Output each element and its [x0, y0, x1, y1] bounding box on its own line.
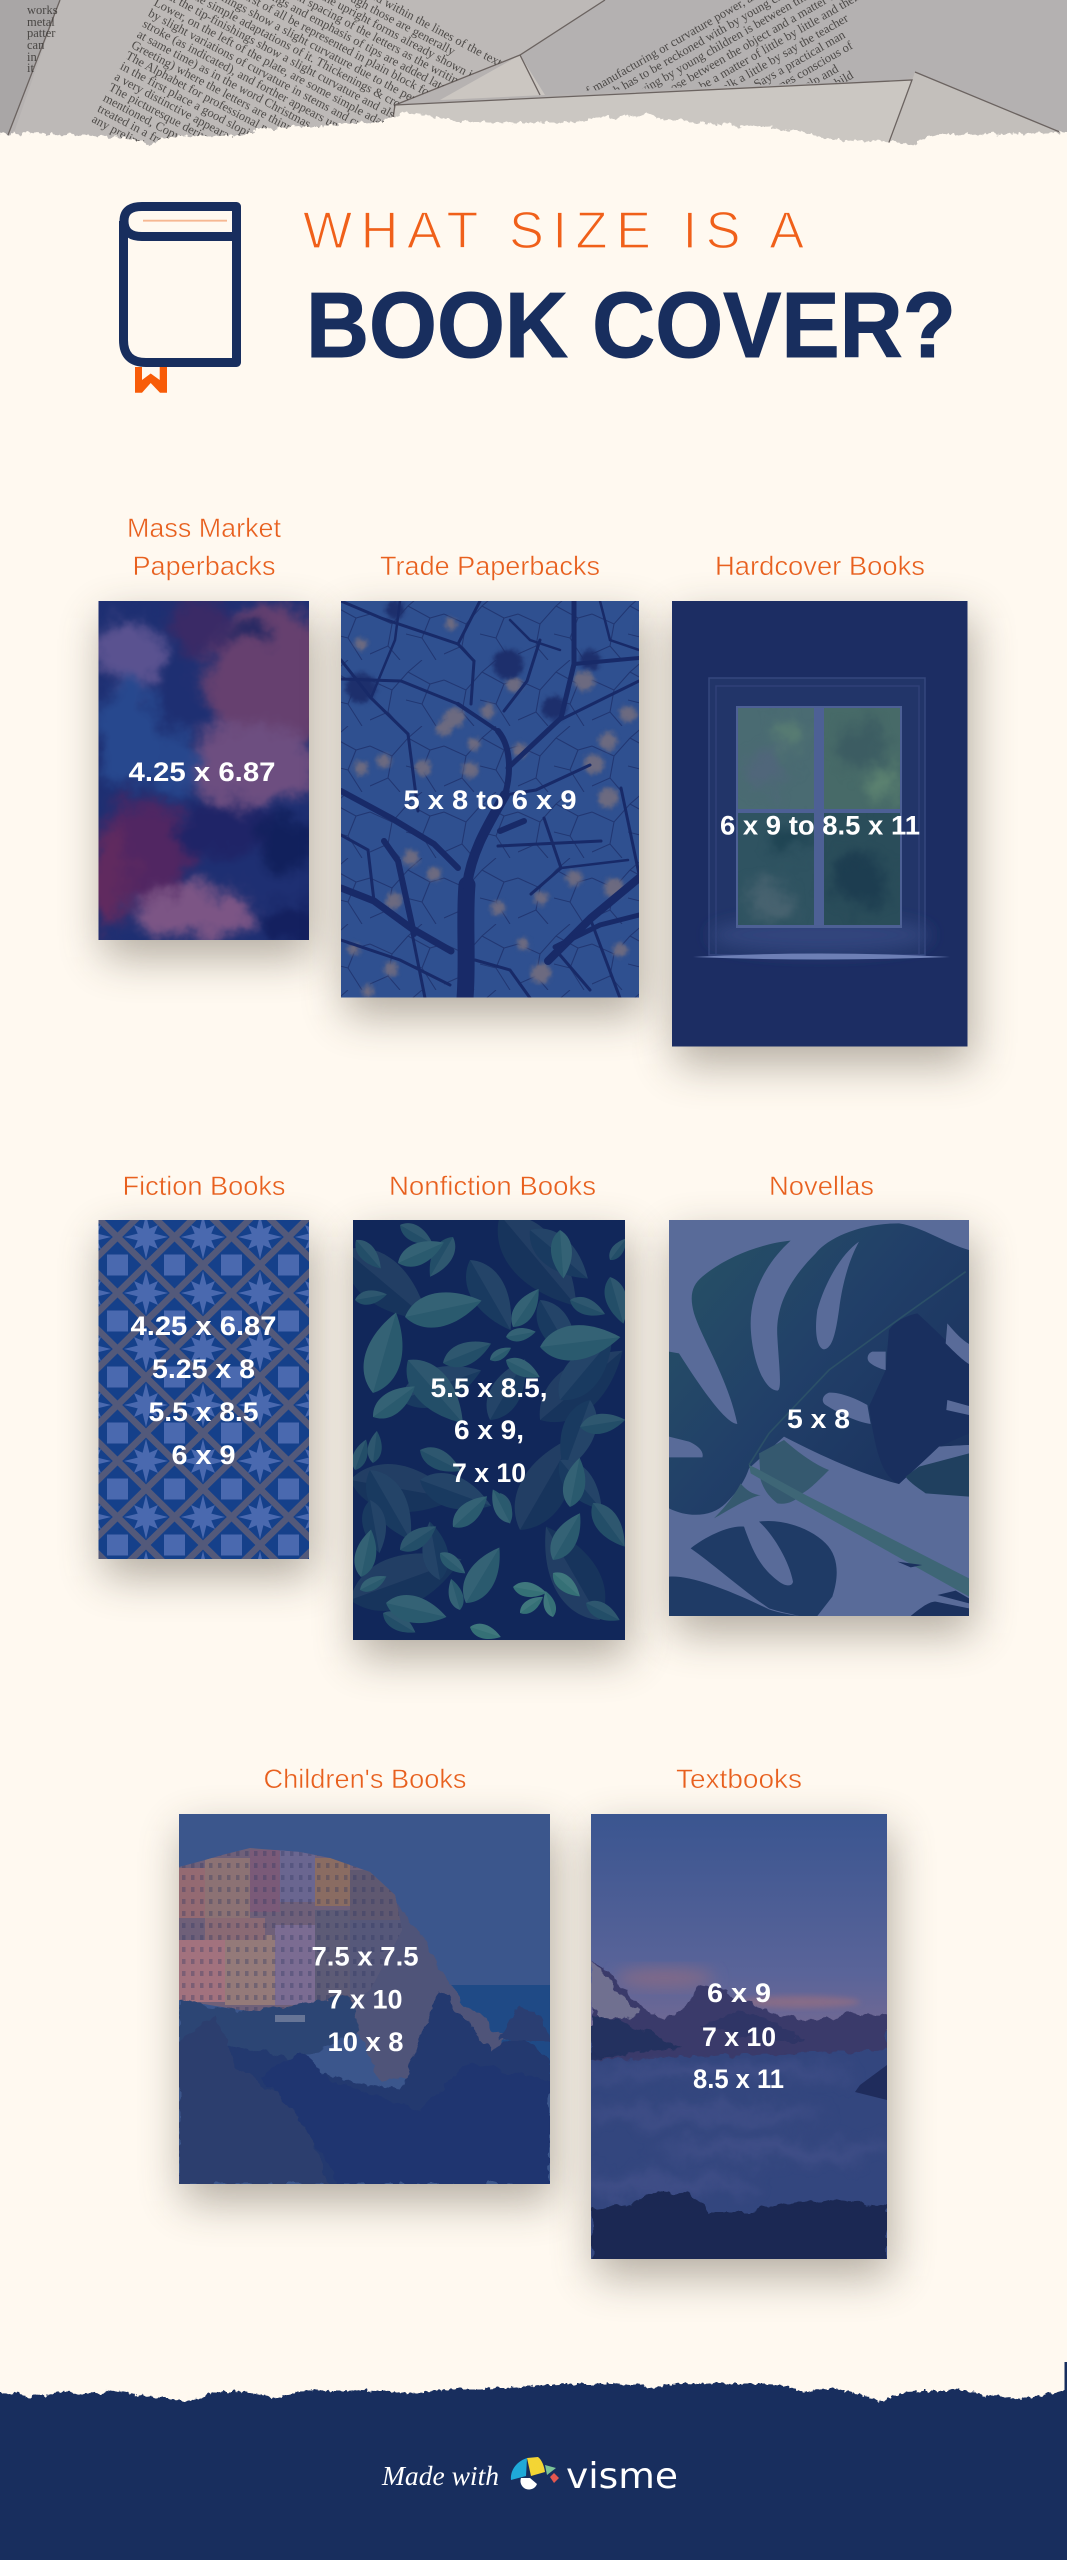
- page text: right page: Every true teacher for instruction, make it a rule: [620, 95, 836, 227]
- cover image: cliffside village: [179, 1814, 550, 2184]
- page text: right page: when the child will be ready to draw for himself: [672, 184, 889, 317]
- page text: left page: The Alphabet for professional purposes has been: [123, 48, 346, 175]
- sizes: 6 x 9: [707, 1978, 771, 2008]
- label: Novellas: [769, 1171, 874, 1201]
- page text: right page: children drawing, Here the teacher must help the child: [613, 68, 856, 216]
- cover image: mountains above clouds: [591, 1814, 887, 2259]
- page text: left page: by slight variations of curvature in stems and cross-bars, & further forms: [146, 6, 474, 189]
- sizes: 5.5 x 8.5: [148, 1397, 258, 1427]
- card: Children's Books: [179, 1764, 554, 2201]
- card: Hardcover Books: [672, 551, 972, 1064]
- label: Fiction Books: [122, 1171, 286, 1201]
- icon: book with bookmark: [124, 206, 237, 393]
- title line 1: WHAT SIZE IS A: [303, 202, 804, 260]
- size: 6 x 9 to 8.5 x 11: [720, 810, 920, 840]
- page text: right page: good opportunity, but soon he teacher must help and: [607, 61, 841, 205]
- page text: right page: the child is impelled toward the right line to make: [646, 135, 869, 272]
- page text: right page: points to a matter of form, and the teacher will: [659, 166, 868, 295]
- sizes: 5.25 x 8: [152, 1354, 255, 1384]
- sizes: 7.5 x 7.5: [312, 1942, 418, 1972]
- cover image: clouds: [98, 601, 309, 940]
- label: Trade Paperbacks: [380, 551, 600, 581]
- sizes: 8.5 x 11: [693, 2064, 784, 2094]
- label: Mass Market: [127, 513, 281, 543]
- page text: left page: stroke (as indicated), and forther appears under the shorted contrast: [140, 16, 445, 187]
- sizes: [130, 1311, 276, 1470]
- page text: left page: in the first place a good sloping series,: [118, 59, 294, 162]
- sizes: 6 x 9: [172, 1440, 236, 1470]
- page text: right page: guidance, will teach the right line and the form: [639, 132, 850, 261]
- cover image: tile pattern: [98, 1220, 309, 1559]
- page text: right page: in all its forms and the work will come in time: [665, 178, 874, 306]
- page text: left page: mentioned, Copy-book: [101, 91, 210, 157]
- page text: left page: any prelimin: [90, 112, 153, 154]
- page text: far-left margin: metal: [27, 15, 55, 29]
- size: 5 x 8: [787, 1404, 850, 1434]
- page text: far-left margin: patter: [27, 26, 56, 40]
- card: Mass Market Paperbacks: [85, 513, 335, 957]
- page text: left page: treated in a free: [95, 101, 171, 150]
- sizes: [693, 1978, 784, 2094]
- page text: right page: and the form and line will then be a good one: [678, 203, 882, 329]
- label: Paperbacks: [132, 551, 276, 581]
- sizes: [312, 1942, 418, 2057]
- page text: right page: are, they often show much life and becomes conscious of: [600, 38, 856, 193]
- icon: visme logo: [511, 2457, 559, 2490]
- title line 2: BOOK COVER?: [306, 273, 956, 377]
- page text: right page: a while, the child sort begins to say, Says a practical man: [594, 27, 848, 182]
- label: Textbooks: [676, 1764, 802, 1794]
- page text: far-left margin: can: [27, 38, 45, 52]
- card: Novellas: [669, 1171, 973, 1633]
- footer credit: [381, 2456, 678, 2497]
- card: Nonfiction Books: [330, 1171, 638, 1657]
- sizes: 6 x 9,: [454, 1415, 524, 1445]
- sizes: 10 x 8: [328, 2027, 404, 2057]
- title: [124, 202, 956, 393]
- cover image: monstera leaf: [669, 1220, 969, 1616]
- card: Textbooks: [540, 1764, 891, 2276]
- sizes: 5.5 x 8.5,: [430, 1373, 548, 1403]
- sizes: 7 x 10: [702, 2022, 776, 2052]
- footer band with torn edge: [0, 2362, 1067, 2560]
- page text: left page: Greeting) where the letters are thinner. It may be added later: [129, 38, 403, 192]
- cover image: leaves: [353, 1220, 625, 1640]
- page text: far-left margin: [27, 3, 58, 75]
- page text: far-left margin: works: [27, 3, 58, 17]
- page text: left page: at same time) as in the word Christmas, and of contrasting: [135, 27, 399, 177]
- page text: right page: tend to make a lead, that is impelled in the work: [652, 151, 868, 283]
- page text: right page: inventiveness, what the child sees in the world: [633, 121, 842, 250]
- page text: right page: difficulties for the child will walk a little by say the teacher: [587, 10, 851, 171]
- made with: Made with: [381, 2461, 499, 2491]
- page text: far-left margin: in: [27, 50, 37, 64]
- torn paper edge at top: [0, 112, 1067, 200]
- page text: far-left margin: it: [27, 61, 34, 75]
- label: Hardcover Books: [715, 551, 925, 581]
- sizes: 7 x 10: [452, 1458, 526, 1488]
- size: 5 x 8 to 6 x 9: [404, 785, 576, 815]
- size: 4.25 x 6.87: [128, 757, 276, 787]
- sizes: 7 x 10: [328, 1984, 402, 2014]
- sizes: [430, 1373, 548, 1488]
- page text: left page: a very distinctive appearance, and of: [112, 69, 281, 168]
- card: Fiction Books: [98, 1171, 313, 1576]
- sizes: 4.25 x 6.87: [130, 1311, 276, 1341]
- page text: left page: The picturesque derivation: [107, 80, 232, 156]
- page text: left page: Lower, on the left of the plate, are some simple adaptations of it, and by these: [152, 0, 501, 190]
- wordmark: visme: [566, 2456, 678, 2497]
- header photo: open book pages: [0, 0, 1067, 146]
- cover image: tree branches: [341, 601, 639, 998]
- card: Trade Paperbacks: [341, 551, 643, 1015]
- label: [127, 513, 281, 581]
- label: Nonfiction Books: [389, 1171, 596, 1201]
- label: Children's Books: [264, 1764, 466, 1794]
- cover image: window: [672, 601, 968, 1047]
- page text: right page: teacher discussion of form, will come to the work: [626, 102, 849, 238]
